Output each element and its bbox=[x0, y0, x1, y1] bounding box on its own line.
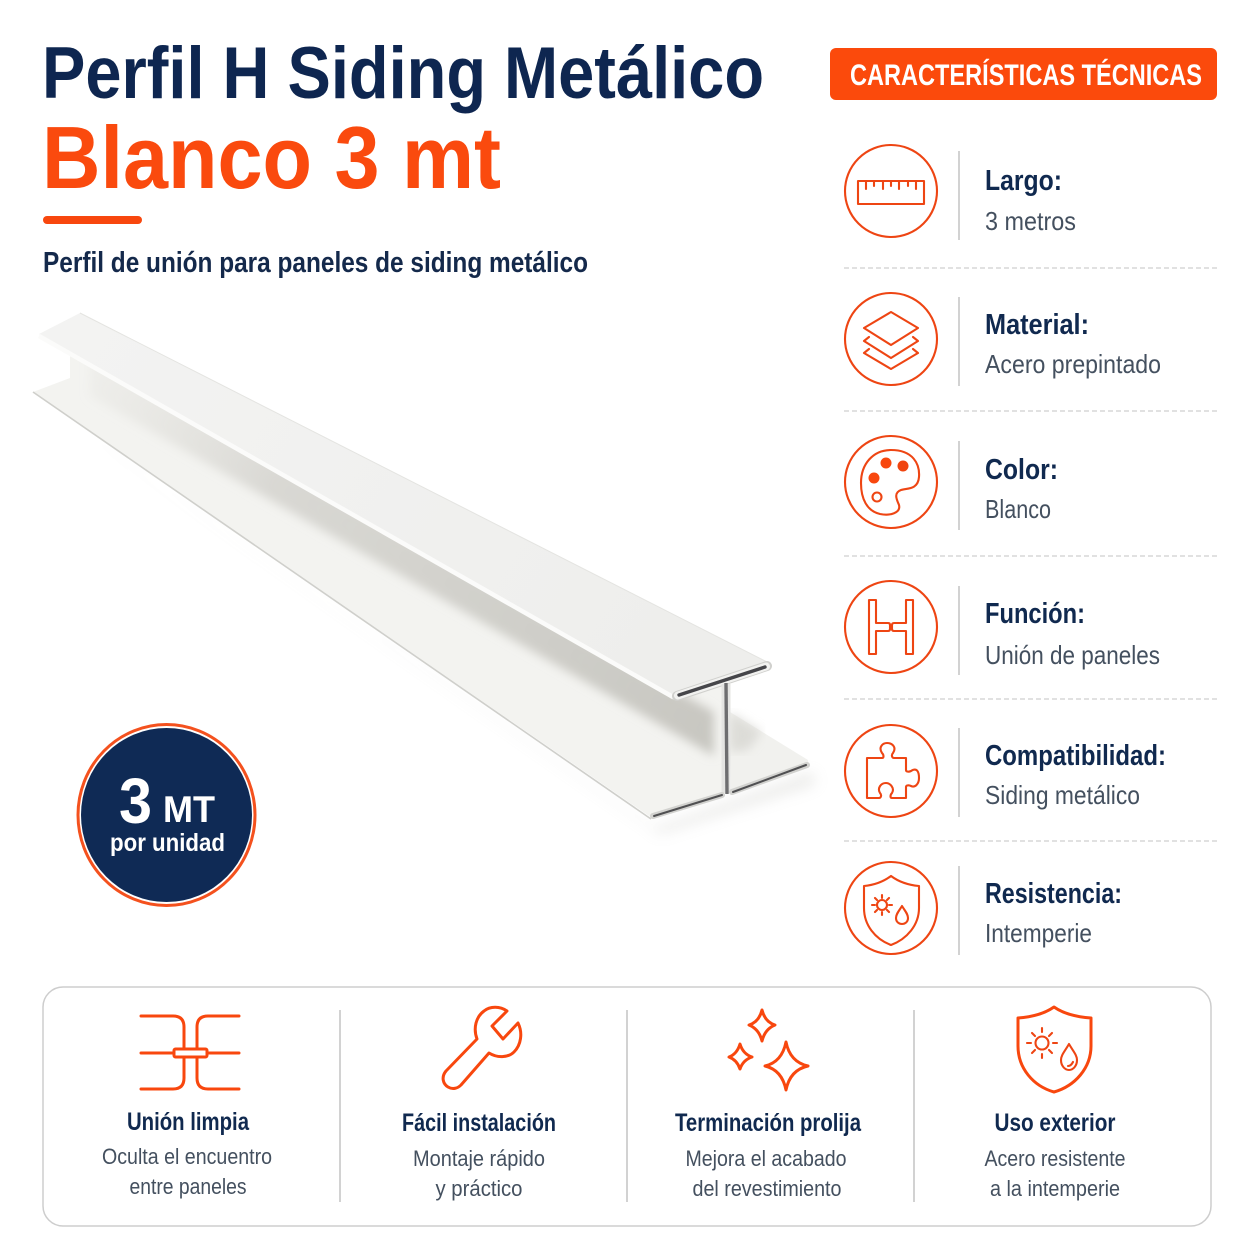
icon: joined profiles bbox=[141, 1016, 239, 1089]
spec: compatibilidad: Siding metálico bbox=[985, 780, 1140, 810]
icon: shield with sun and drop bbox=[845, 862, 937, 954]
bottom flange outer edge bbox=[33, 392, 651, 819]
badge: 3 MT por unidad bbox=[78, 724, 255, 906]
benefit: fácil instalación: y práctico bbox=[436, 1176, 522, 1201]
product image: H profile bbox=[33, 313, 816, 834]
benefit: uso exterior: a la intemperie bbox=[990, 1176, 1120, 1201]
spec: función: Unión de paneles bbox=[985, 640, 1160, 670]
icon: sparkles bbox=[729, 1010, 808, 1090]
benefit: unión limpia: Unión limpia bbox=[127, 1108, 250, 1136]
spec: material: Acero prepintado bbox=[985, 349, 1161, 379]
spec: compatibilidad bbox=[845, 725, 1166, 817]
subtitle: Perfil de unión para paneles de siding metálico bbox=[43, 247, 588, 279]
spec: color: Blanco bbox=[985, 494, 1051, 524]
benefit: unión limpia bbox=[102, 1016, 272, 1199]
badge: 3 MT por unidad: por unidad bbox=[110, 829, 225, 857]
spec: resistencia bbox=[845, 862, 1122, 955]
spec: material: Material: bbox=[985, 309, 1089, 341]
spec: función bbox=[845, 581, 1160, 675]
web end bbox=[722, 684, 730, 793]
header: características técnicas bbox=[830, 48, 1217, 100]
benefit: terminación prolija: Mejora el acabado bbox=[686, 1146, 846, 1171]
spec: color: Color: bbox=[985, 454, 1058, 486]
web and front of bottom flange bbox=[33, 354, 722, 818]
icon: layers bbox=[845, 293, 937, 385]
spec: función: Función: bbox=[985, 598, 1085, 630]
benefit: uso exterior: Acero resistente bbox=[984, 1146, 1126, 1171]
icon: palette bbox=[845, 436, 937, 528]
benefit: uso exterior bbox=[984, 1007, 1126, 1201]
panel: benefits bbox=[43, 987, 1211, 1226]
benefit: unión limpia: Oculta el encuentro bbox=[102, 1144, 272, 1169]
spec: material bbox=[845, 293, 1161, 386]
benefit: fácil instalación: Fácil instalación bbox=[402, 1109, 556, 1137]
title: Blanco 3 mt bbox=[42, 108, 501, 207]
title: Perfil H Siding Metálico bbox=[42, 33, 764, 114]
top flange bbox=[39, 313, 771, 700]
spec: largo: 3 metros bbox=[985, 206, 1076, 236]
icon: wrench bbox=[443, 1007, 521, 1088]
icon: H profile bbox=[845, 581, 937, 673]
back part of bottom flange bbox=[730, 712, 808, 793]
benefit: uso exterior: Uso exterior bbox=[994, 1109, 1116, 1137]
end of top flange bbox=[677, 666, 767, 696]
icon: puzzle piece bbox=[845, 725, 937, 817]
benefit: terminación prolija: del revestimiento bbox=[692, 1176, 842, 1201]
badge: 3 MT por unidad: 3 bbox=[119, 765, 152, 837]
benefit: fácil instalación bbox=[402, 1007, 556, 1201]
bottom flange ends bbox=[653, 795, 722, 816]
benefit: unión limpia: entre paneles bbox=[130, 1174, 246, 1199]
spec: resistencia: Resistencia: bbox=[985, 878, 1122, 910]
benefit: fácil instalación: Montaje rápido bbox=[413, 1146, 545, 1171]
spec: largo bbox=[845, 145, 1076, 240]
spec: color bbox=[845, 436, 1058, 530]
title bbox=[42, 33, 764, 207]
icon: ruler bbox=[845, 145, 937, 237]
title accent bar bbox=[43, 216, 142, 224]
shadow band on the web bbox=[116, 388, 718, 756]
icon: shield with sun and drop bbox=[1018, 1007, 1091, 1092]
benefit: terminación prolija bbox=[675, 1010, 862, 1201]
spec: largo: Largo: bbox=[985, 165, 1062, 197]
spec: compatibilidad: Compatibilidad: bbox=[985, 740, 1166, 772]
spec: resistencia: Intemperie bbox=[985, 918, 1092, 948]
soft ground shadow bbox=[40, 402, 816, 834]
badge: 3 MT por unidad: MT bbox=[163, 789, 215, 830]
benefit: terminación prolija: Terminación prolija bbox=[675, 1109, 862, 1137]
